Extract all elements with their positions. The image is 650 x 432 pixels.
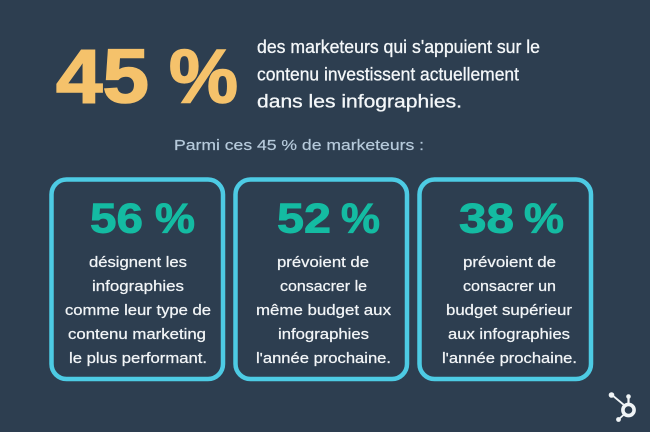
description: 56 % — [65, 254, 211, 367]
stat: 52 %: 52 — [277, 194, 331, 242]
description: 52 %: l'année prochaine. — [256, 350, 391, 367]
stat: 38 %: 38 — [459, 194, 514, 242]
description: 38 %: l'année prochaine. — [442, 350, 577, 367]
description: 52 %: infographies — [278, 326, 369, 343]
description: 38 %: consacrer un — [463, 278, 556, 295]
icon: HubSpot sprocket logo — [609, 392, 634, 422]
panel: 38 % — [420, 180, 591, 379]
description: 56 %: contenu marketing — [68, 326, 206, 343]
headline statistic: 45 %: % — [169, 34, 238, 120]
description: 52 %: même budget aux — [256, 302, 392, 319]
stat: 38 % — [459, 194, 564, 242]
panel: 56 % — [52, 180, 223, 379]
intro text block — [257, 36, 540, 112]
description: 52 %: consacrer le — [280, 278, 367, 295]
description: 52 %: prévoient de — [277, 254, 369, 271]
intro text block: contenu investissent actuellement — [257, 64, 519, 84]
stat: 56 %: % — [155, 194, 195, 242]
intro text block: des marketeurs qui s'appuient sur le — [257, 36, 540, 57]
panel: 52 % — [236, 180, 407, 379]
description: 38 %: budget supérieur — [446, 302, 572, 319]
headline statistic: 45 %: 45 — [56, 34, 149, 120]
description: 52 % — [256, 254, 392, 367]
stat: 38 %: % — [524, 194, 564, 242]
description: 56 %: le plus performant. — [69, 350, 207, 367]
stat: 56 %: 56 — [90, 194, 143, 242]
stat: 52 %: % — [341, 194, 380, 242]
stat: 52 % — [277, 194, 380, 242]
description: 56 %: infographies — [92, 278, 184, 295]
description: 38 % — [442, 254, 577, 367]
subheading: Parmi ces 45 % de marketeurs : — [174, 137, 424, 154]
description: 38 %: prévoient de — [463, 254, 556, 271]
description: 56 %: comme leur type de — [65, 302, 211, 319]
intro text block: dans les infographies. — [257, 90, 462, 112]
stat: 56 % — [90, 194, 195, 242]
description: 38 %: aux infographies — [448, 326, 570, 343]
headline statistic: 45 % — [56, 34, 238, 120]
description: 56 %: désignent les — [89, 254, 187, 271]
